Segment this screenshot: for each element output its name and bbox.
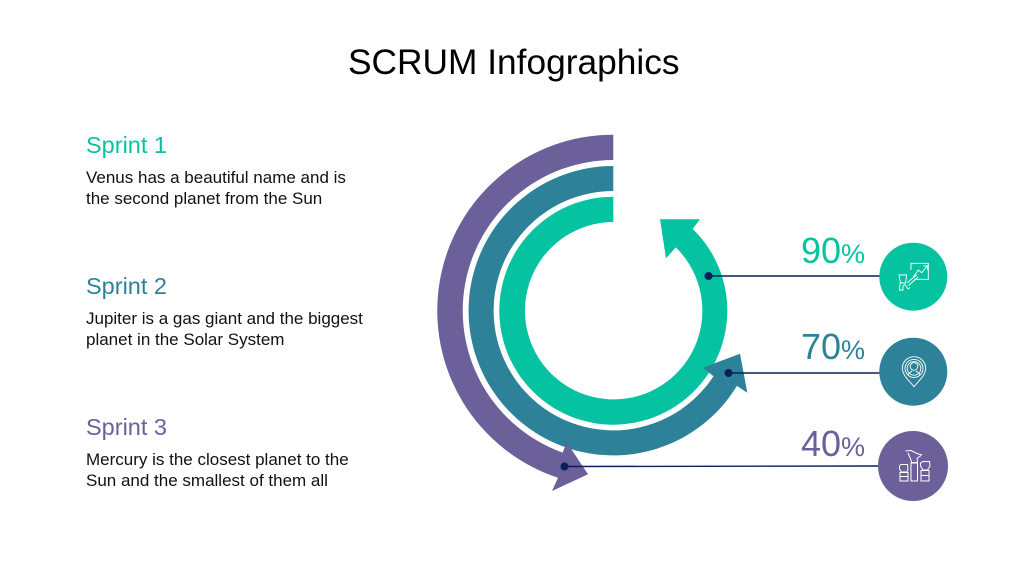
connector: 40% xyxy=(560,462,880,470)
stat: 90%: 90% xyxy=(801,230,865,271)
description: sprint 3 xyxy=(86,450,349,490)
teal ring arrow xyxy=(469,166,747,455)
purple ring arrow xyxy=(437,135,613,491)
stat: 70%: 70% xyxy=(801,326,865,367)
description: sprint 1: the second planet from the Sun xyxy=(86,189,322,208)
heading: sprint 3: Sprint 3 xyxy=(86,414,167,440)
connector: 70% xyxy=(724,369,882,377)
description: sprint 1 xyxy=(86,168,346,208)
text block: sprint 2 xyxy=(86,273,363,349)
icon: presentation chart xyxy=(879,243,947,311)
description: sprint 3: Sun and the smallest of them all xyxy=(86,471,328,490)
circular arrow chart xyxy=(437,135,747,491)
stat: 40%: 40% xyxy=(801,423,865,464)
title: SCRUM Infographics xyxy=(348,43,680,82)
description: sprint 3: Mercury is the closest planet to the xyxy=(86,450,349,469)
description: sprint 2: planet in the Solar System xyxy=(86,330,284,349)
text block: sprint 1 xyxy=(86,132,346,208)
description: sprint 2: Jupiter is a gas giant and the biggest xyxy=(86,309,363,328)
icon: location pin with person xyxy=(879,338,947,406)
text block: sprint 3 xyxy=(86,414,349,490)
icon: raised fists xyxy=(878,431,948,501)
description: sprint 1: Venus has a beautiful name and is xyxy=(86,168,346,187)
description: sprint 2 xyxy=(86,309,363,349)
green ring arrow xyxy=(499,197,727,425)
heading: sprint 1: Sprint 1 xyxy=(86,132,167,158)
connector: 90% xyxy=(704,272,882,280)
heading: sprint 2: Sprint 2 xyxy=(86,273,167,299)
